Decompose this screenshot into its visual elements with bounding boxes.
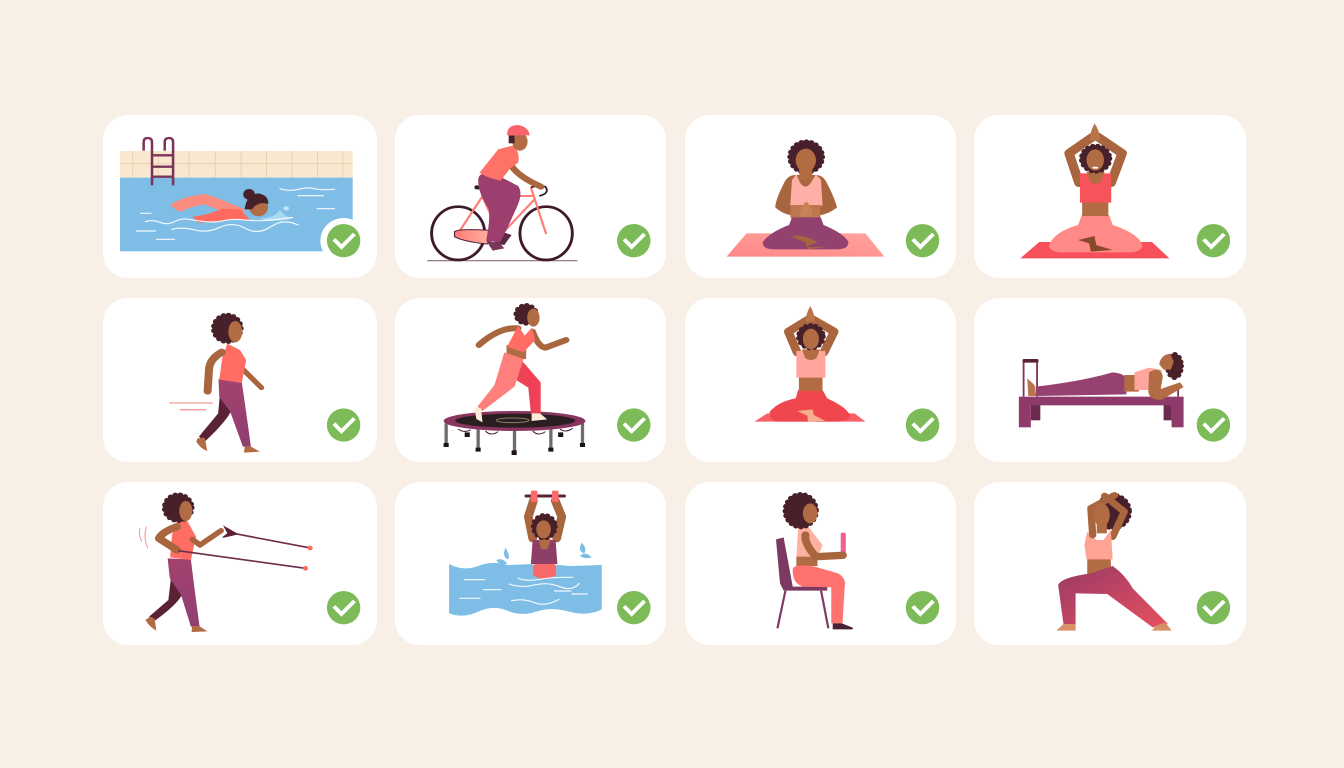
badge: check mark	[1197, 224, 1230, 257]
badge: check mark	[1197, 408, 1230, 442]
illustration: yoga figure with palms overhead	[755, 306, 865, 422]
panel: swimming	[103, 115, 377, 278]
badge: check mark	[906, 224, 939, 257]
card background	[974, 482, 1246, 645]
panel: water aerobics	[395, 482, 666, 645]
card background	[103, 115, 377, 278]
illustration: figure with resistance bands	[139, 495, 313, 632]
illustration: yoga figure on red mat	[1020, 123, 1169, 258]
badge: check mark	[320, 218, 367, 263]
card background	[103, 298, 377, 462]
panel: seated yoga with raised arms	[974, 115, 1246, 278]
badge: check mark	[906, 408, 939, 442]
card background	[395, 298, 666, 462]
illustration: swimmer in pool	[120, 138, 353, 251]
card background	[685, 482, 956, 645]
panel: seated meditation	[685, 115, 956, 278]
panel: walking	[103, 298, 377, 462]
panel: pilates reformer	[974, 298, 1246, 462]
illustration: figure on reformer	[1019, 354, 1184, 427]
badge: check mark	[617, 408, 650, 442]
badge: check mark	[617, 224, 650, 257]
card background	[974, 115, 1246, 278]
badge: check mark	[1197, 591, 1230, 624]
illustration: walking figure	[169, 315, 261, 453]
panel: cycling	[395, 115, 666, 278]
illustration: cyclist	[427, 125, 577, 261]
illustration: figure on mini trampoline	[444, 306, 585, 455]
illustration: meditating figure	[727, 142, 884, 257]
card background	[685, 298, 956, 462]
card background	[103, 482, 377, 645]
panel: seated yoga on coral mat	[685, 298, 956, 462]
card background	[395, 482, 666, 645]
badge: check mark	[617, 591, 650, 624]
badge: check mark	[906, 591, 939, 624]
panel: trampoline	[395, 298, 666, 462]
badge: check mark	[327, 408, 360, 442]
badge: check mark	[327, 591, 360, 624]
card background	[395, 115, 666, 278]
panel: chair exercise	[685, 482, 956, 645]
panel: resistance band	[103, 482, 377, 645]
panel: lunge stretch	[974, 482, 1246, 645]
card background	[685, 115, 956, 278]
illustration: lunging figure	[1056, 495, 1172, 631]
card background	[974, 298, 1246, 462]
illustration: seated figure with weight	[776, 495, 853, 629]
illustration: figure lifting dumbbell in water	[449, 491, 602, 616]
